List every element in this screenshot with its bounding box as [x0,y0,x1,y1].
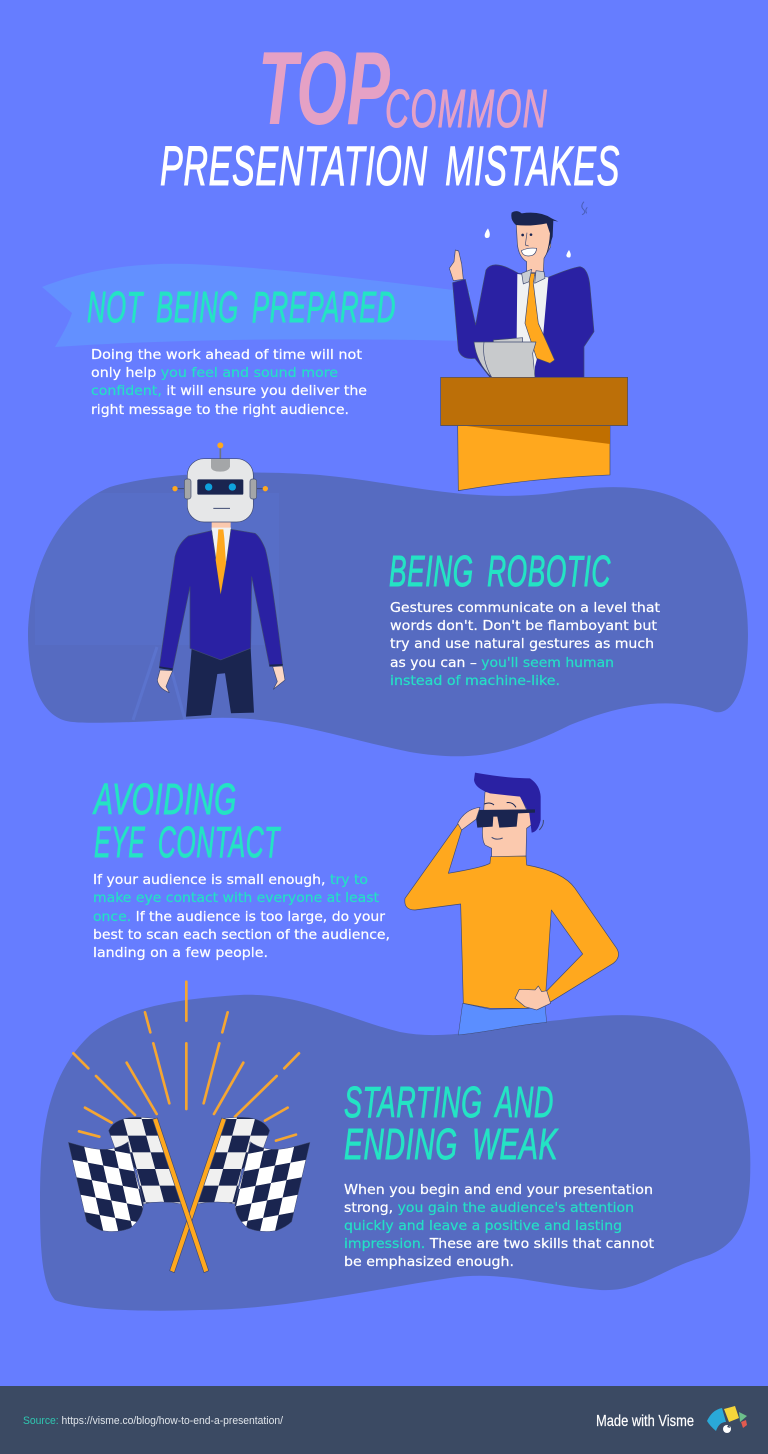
hair [474,773,541,833]
right flag [197,1117,310,1232]
source link: Source: https://visme.co/blog/how-to-end-a-presentation/ [23,1415,284,1427]
heading: avoiding eye contact [92,775,281,867]
jacket [453,265,594,377]
illustration: nervous presenter at podium [441,202,628,491]
visor [197,479,243,495]
neck [212,520,231,530]
body text: confident, it will ensure you deliver the [91,384,367,399]
jeans [458,1003,547,1035]
body text: best to scan each section of the audience, [93,928,390,943]
body text: once. If the audience is too large, do your [93,910,386,925]
body text [93,873,390,961]
panel: blob behind starting and ending weak [40,995,750,1311]
raised hand [449,250,463,281]
neck and face [482,792,534,857]
section 1: not being prepared [87,283,396,418]
heading: starting and ending weak: STARTING AND [344,1078,554,1127]
section 3: avoiding eye contact [92,775,390,961]
title word: COMMON: COMMON [385,79,548,139]
sweater [405,823,619,1008]
podium shadow [467,426,610,444]
podium top [441,377,628,426]
footer [0,1386,768,1454]
face details [521,233,537,256]
section 4: starting and ending weak [344,1078,654,1270]
hair [511,211,558,258]
mouth [492,820,543,839]
section 2: being robotic [389,547,660,689]
body text [344,1183,654,1270]
raised hand [458,807,480,830]
title [160,31,620,197]
heading: not being prepared: NOT BEING PREPARED [87,283,396,332]
sunglasses [475,809,535,828]
body text: instead of machine-like. [390,674,560,689]
body text: Gestures communicate on a level that [390,601,660,616]
hip hand [515,986,551,1010]
mouth [213,507,230,510]
tie [525,273,555,363]
body text [91,348,367,418]
body text: only help you feel and sound more [91,366,338,381]
antenna base [211,459,230,472]
papers [474,338,536,377]
eyes [205,483,236,491]
icon: sweat drops [485,228,571,257]
body text: be emphasized enough. [344,1255,514,1270]
collar [522,269,545,284]
icon: visme logo [707,1406,747,1433]
illustration: crossed checkered flags [68,982,310,1273]
eyebrows [484,803,516,807]
body text: make eye contact with everyone at least [93,891,379,906]
body text: landing on a few people. [93,946,268,961]
illustration: robot presenter [157,442,285,717]
head [516,220,552,273]
body text: words don't. Don't be flamboyant but [390,619,657,634]
made with visme: Made with Visme [596,1413,694,1430]
body text: If your audience is small enough, try to [93,873,368,888]
illustration: man with sunglasses [405,773,619,1035]
body text: quickly and leave a positive and lasting [344,1219,622,1234]
heading: starting and ending weak: ENDING WEAK [344,1120,558,1169]
jacket [159,529,283,669]
left flag [68,1117,182,1232]
shirt [517,274,548,377]
tie [216,529,226,594]
robot ears [172,479,268,499]
icon: smoke squiggle [582,202,587,215]
heading: starting and ending weak [344,1078,558,1169]
body text: When you begin and end your presentation [344,1183,653,1198]
body text: impression. These are two skills that cannot [344,1237,654,1252]
body text: Doing the work ahead of time will not [91,348,362,363]
body text: try and use natural gestures as much [390,637,654,652]
pants [186,648,254,717]
antenna [217,442,223,460]
body text [390,601,660,689]
footer bar [0,1386,768,1454]
podium base [458,426,610,491]
body text: as you can – you'll seem human [390,656,614,671]
shirt [212,528,231,563]
heading: being robotic: BEING ROBOTIC [389,547,611,596]
faint lighter panel inside blob [132,646,186,720]
heading: avoiding eye contact: EYE CONTACT [94,818,281,867]
body text: strong, you gain the audience's attention [344,1201,634,1216]
poles [153,1118,226,1273]
banner ribbon [42,264,470,347]
robot head [187,459,253,522]
title word: TOP: TOP [258,31,390,147]
jacket cuffs [159,665,283,669]
hands [157,666,285,693]
heading: avoiding eye contact: AVOIDING [92,775,237,824]
panel: blob behind being robotic [28,473,748,756]
body text: right message to the right audience. [91,403,349,418]
rays [73,982,299,1141]
